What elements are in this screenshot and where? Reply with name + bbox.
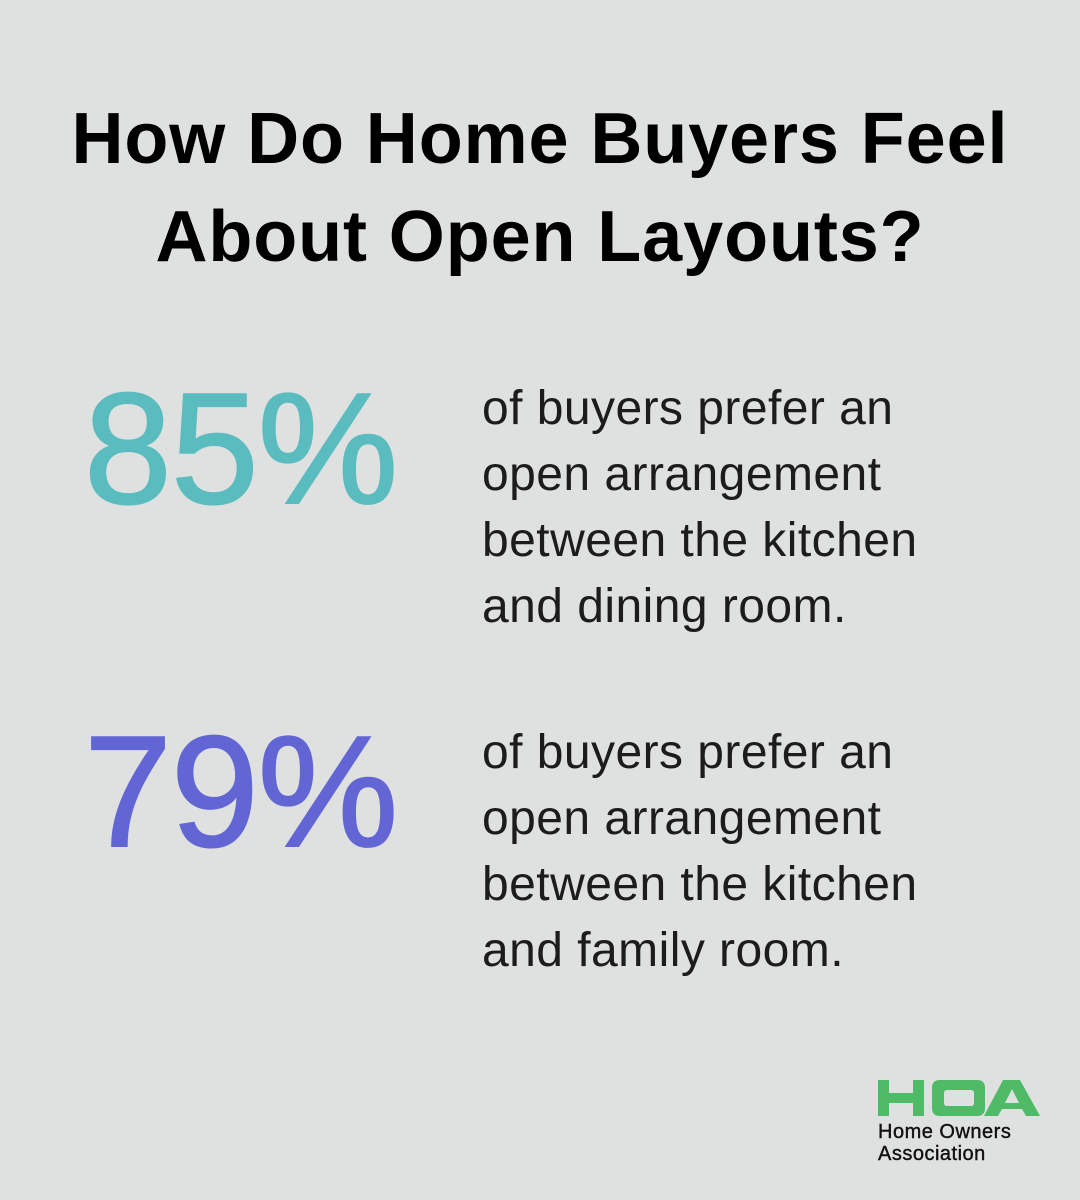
text: kitchen and dining room [482, 382, 918, 633]
text: kitchen and family room: open arrangement [482, 792, 881, 845]
text: kitchen and dining room: and dining room. [482, 580, 847, 633]
statistic: 85%: 85% [84, 361, 397, 537]
logo text: Home Owners [878, 1121, 1011, 1143]
text: kitchen and family room [482, 726, 918, 977]
logo text [878, 1121, 1011, 1165]
text: kitchen and dining room: open arrangement [482, 448, 881, 501]
title [72, 99, 1008, 277]
text: kitchen and dining room: of buyers prefer an [482, 382, 893, 435]
statistic: 79%: 79% [84, 704, 397, 880]
text: kitchen and family room: and family room. [482, 924, 844, 977]
title: How Do Home Buyers Feel [72, 99, 1008, 179]
text: kitchen and family room: between the kitchen [482, 858, 918, 911]
text: kitchen and dining room: between the kitchen [482, 514, 918, 567]
title: About Open Layouts? [155, 197, 925, 277]
logo text: Association [878, 1143, 986, 1165]
logo: HOA Home Owners Association [878, 1080, 1040, 1165]
logo mark: HOA letters [878, 1080, 1040, 1116]
text: kitchen and family room: of buyers prefer an [482, 726, 893, 779]
